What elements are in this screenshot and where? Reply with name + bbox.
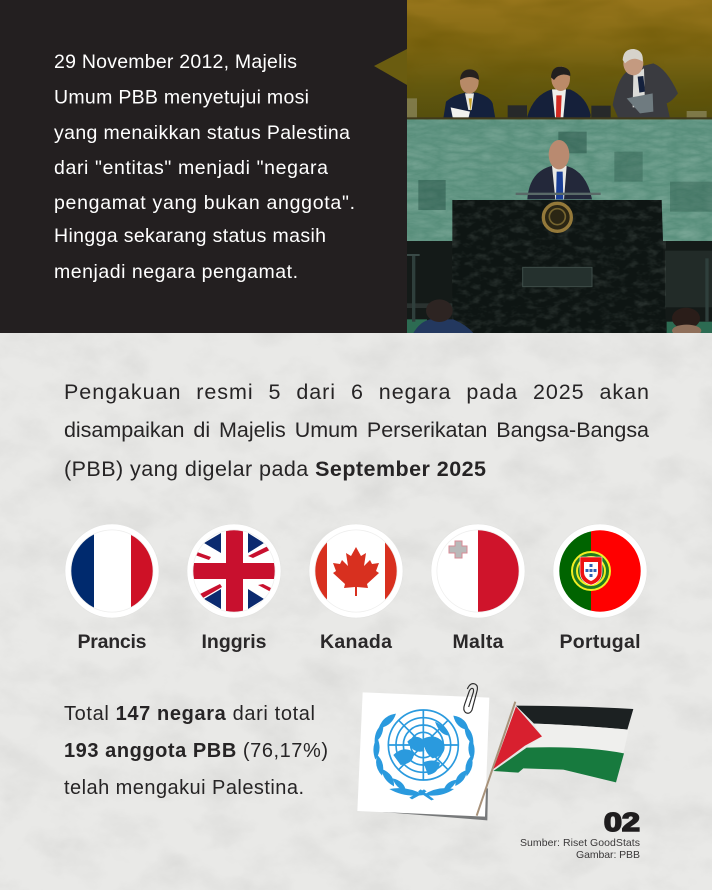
audience heads (414, 300, 702, 333)
intro text: yang menaikkan status Palestina (54, 122, 350, 144)
paragraph: recognition in September 2025: Pengakuan resmi 5 dari 6 negara pada 2025 akan (64, 380, 649, 404)
paragraph: recognition in September 2025: (PBB) yang digelar pada September 2025 (64, 457, 486, 481)
person: left seated official (443, 69, 495, 119)
source credits: Gambar: PBB (576, 849, 640, 861)
intro text: menjadi negara pengamat. (54, 261, 298, 283)
pinned note with UN emblem (357, 684, 489, 820)
stat text: 147 of 193: Total 147 negara dari total (64, 703, 315, 725)
paperclip (464, 684, 477, 713)
stat text: 147 of 193: 193 anggota PBB (76,17%) (64, 740, 328, 762)
flag label: Portugal: Portugal (560, 631, 640, 653)
intro text: Hingga sekarang status masih (54, 225, 326, 247)
flag label: Malta: Malta (452, 631, 504, 653)
flag: United Kingdom (187, 524, 281, 618)
flag: France (65, 524, 159, 618)
UN emblem (373, 710, 475, 800)
flag label: France: Prancis (78, 631, 147, 653)
notch arrow pointing to text (374, 49, 407, 85)
page number: 02 (604, 808, 640, 837)
note paper (357, 692, 489, 820)
paragraph: recognition in September 2025 (64, 380, 649, 481)
intro text: dari "entitas" menjadi "negara (54, 157, 328, 179)
stat text: 147 of 193: telah mengakui Palestina. (64, 777, 304, 799)
flag: Portugal (553, 524, 647, 618)
desk items (407, 98, 712, 119)
photo: UN General Assembly podium (407, 0, 712, 337)
intro text: Umum PBB menyetujui mosi (54, 86, 309, 108)
flag label: Canada: Kanada (320, 631, 392, 653)
person: standing official (613, 49, 678, 118)
podium (452, 200, 666, 333)
stat text: 147 of 193 (64, 703, 328, 799)
flag label: United Kingdom: Inggris (202, 631, 267, 653)
person: speaker at podium (516, 140, 601, 199)
paper background (0, 333, 712, 890)
flag: Canada (309, 524, 403, 618)
source credits: Sumber: Riset GoodStats (520, 837, 640, 849)
intro text (54, 51, 355, 283)
source credits (520, 837, 640, 861)
intro text: pengamat yang bukan anggota". (54, 192, 355, 214)
person: centre seated official (527, 66, 591, 119)
paragraph: recognition in September 2025: disampaikan di Majelis Umum Perserikatan Bangsa-Bangsa (64, 418, 649, 442)
panel: dark intro panel (0, 0, 407, 333)
intro text: 29 November 2012, Majelis (54, 51, 297, 73)
flag: Malta (431, 524, 525, 618)
flagpole (477, 702, 515, 816)
Palestinian flag (477, 702, 633, 816)
